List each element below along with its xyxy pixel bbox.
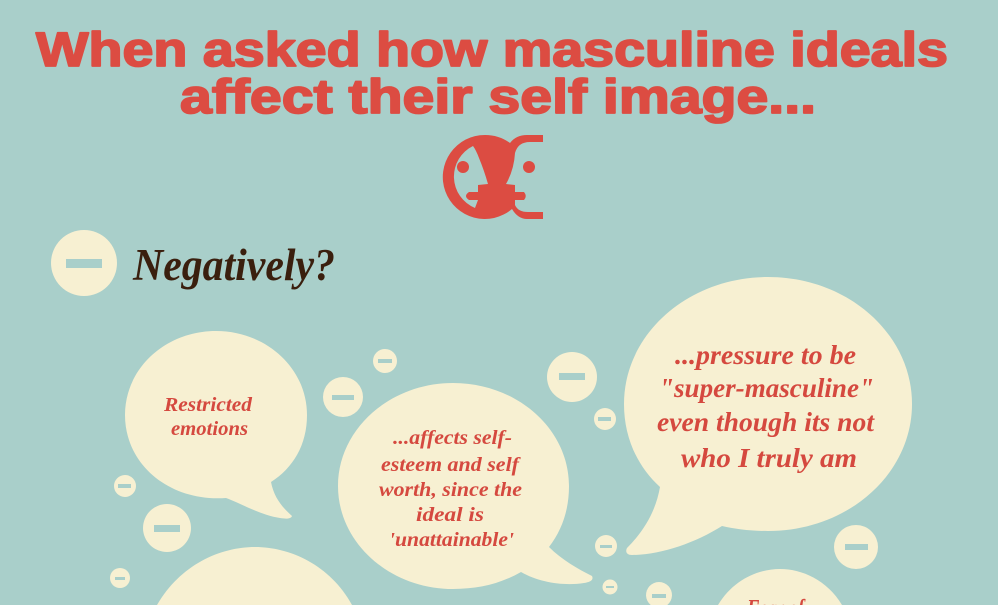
speech bubble: bottom right — [718, 569, 842, 605]
speech bubble: super-masculine pressure: who I truly am — [681, 443, 857, 473]
speech bubble: self-esteem: ...affects self- — [393, 427, 512, 449]
speech bubble: super-masculine pressure — [624, 277, 912, 555]
speech bubble: self-esteem — [338, 383, 593, 589]
heading: Negatively?: Negatively? — [132, 240, 335, 290]
title: When asked how masculine ideals — [36, 24, 948, 77]
speech bubble: restricted emotions — [125, 331, 307, 519]
speech bubble: self-esteem: esteem and self — [381, 454, 522, 476]
title — [36, 24, 948, 124]
speech bubble: super-masculine pressure: "super-masculine" — [659, 373, 874, 403]
speech bubble: super-masculine pressure: even though its not — [657, 407, 876, 437]
speech bubble: self-esteem: 'unattainable' — [389, 529, 514, 551]
speech bubble: bottom left — [157, 547, 352, 605]
speech bubble: restricted emotions: Restricted — [163, 394, 253, 416]
icon: header minus — [51, 230, 117, 296]
title: affect their self image... — [180, 71, 816, 124]
minus badges — [110, 349, 878, 605]
speech bubble: super-masculine pressure: ...pressure to be — [675, 340, 856, 370]
speech bubble: restricted emotions: emotions — [171, 418, 248, 440]
speech bubble: self-esteem: ideal is — [416, 504, 484, 526]
speech bubble: self-esteem: worth, since the — [379, 479, 522, 501]
icon: two faces — [443, 135, 543, 219]
